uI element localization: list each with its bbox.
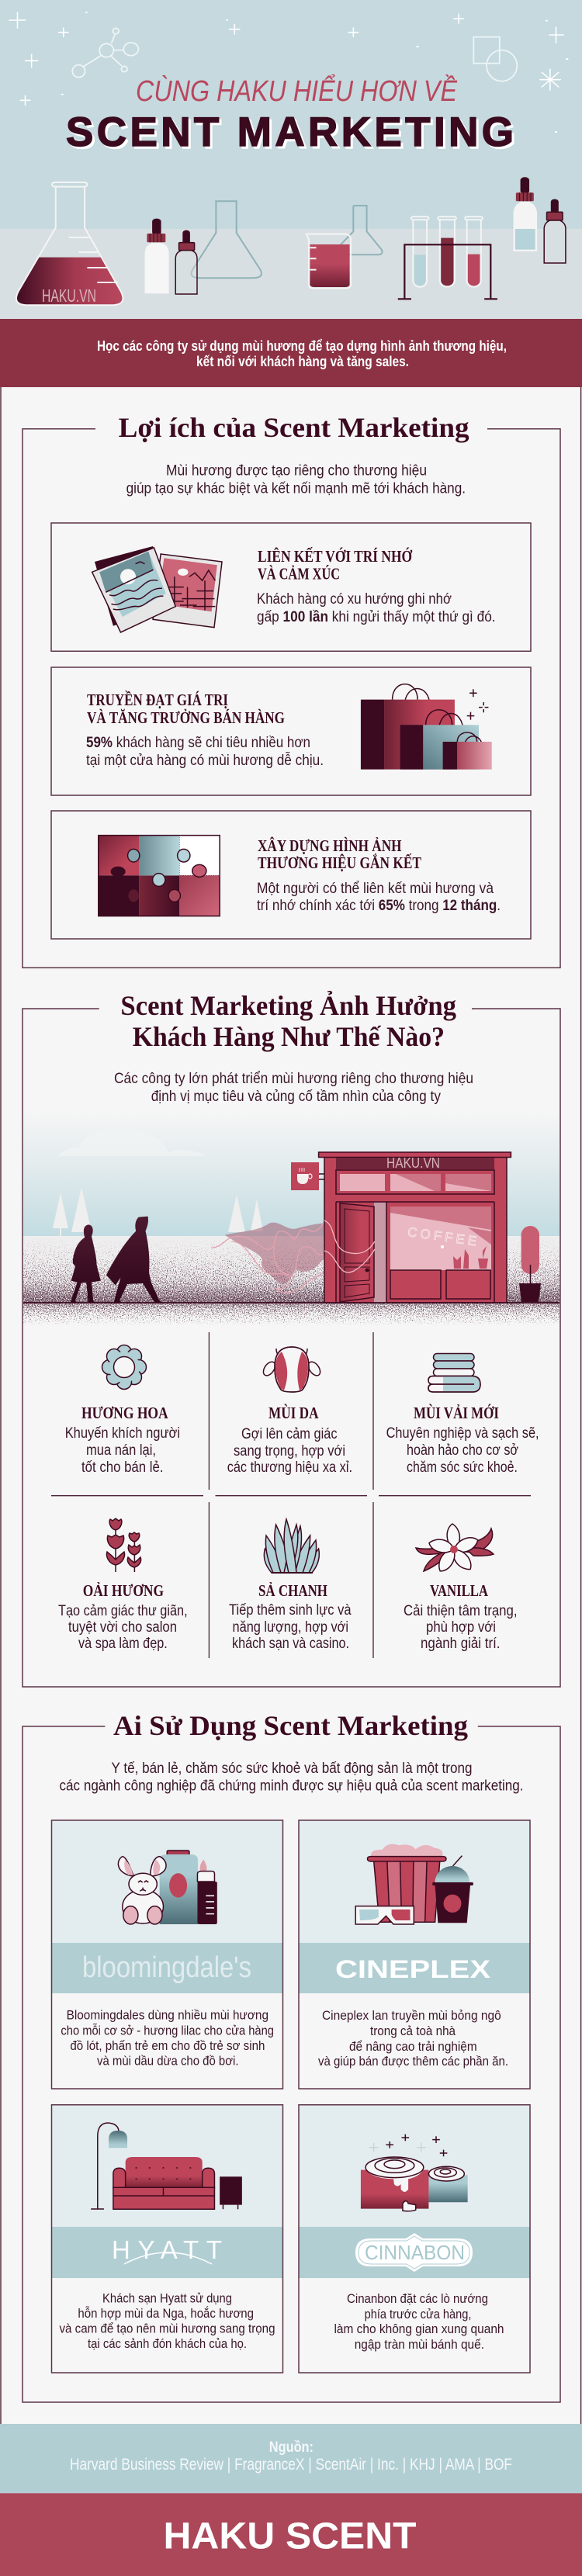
clouds (57, 1128, 206, 1156)
heading: influence: Scent Marketing Ảnh Hưởng (120, 990, 456, 1021)
scent item: floral (65, 1345, 180, 1476)
scent item: lavender (58, 1518, 188, 1652)
heading: lemongrass: SẢ CHANH (258, 1581, 327, 1600)
logo: cinnabon: CINNABON (365, 2241, 465, 2264)
card: cineplex: và giúp bán được thêm các phần ăn. (318, 2054, 508, 2069)
card: bloomingdales (51, 1820, 282, 2089)
heading: new fabric: MÙI VẢI MỚI (414, 1404, 499, 1422)
lower wall panels (390, 1270, 441, 1299)
teal outlined flasks (192, 201, 383, 278)
heading: leather: MÙI DA (268, 1404, 319, 1422)
heading: floral: HƯƠNG HOA (81, 1404, 168, 1422)
benefits intro: Mùi hương được tạo riêng cho thương hiệu (166, 463, 427, 480)
scent item: lemongrass: năng lượng, hợp với (233, 1619, 348, 1636)
sky (23, 1110, 559, 1236)
icon: sofa and lamp (91, 2123, 242, 2209)
icon: lavender (106, 1518, 141, 1572)
text: lavender: Tạo cảm giác thư giãn, (58, 1603, 188, 1619)
grid dividers (51, 1332, 531, 1658)
scent item: new fabric: hoàn hảo cho cơ sở (407, 1442, 518, 1459)
influence intro: Các công ty lớn phát triển mùi hương riêng cho thương hiệu (114, 1071, 473, 1087)
coffee window text: COFFEE (407, 1224, 480, 1249)
scent item: lavender: tuyệt vời cho salon (68, 1619, 177, 1636)
people walking (71, 1217, 162, 1303)
scent item: new fabric (386, 1353, 539, 1476)
card: cinnabon: ngập tràn mùi bánh quế. (355, 2337, 484, 2352)
door frame (336, 1202, 494, 1303)
scent item: floral: tốt cho bán lẻ. (81, 1459, 163, 1476)
text: hyatt: Khách sạn Hyatt sử dụng (102, 2290, 232, 2305)
heading: memory: LIÊN KẾT VỚI TRÍ NHỚ (258, 547, 413, 566)
title line one: CÙNG HAKU HIỂU HƠN VỀ (136, 73, 458, 108)
card: hyatt: hỗn hợp mùi da Nga, hoắc hương (78, 2306, 254, 2321)
icon: cow (261, 1347, 323, 1392)
scent item: lemongrass: khách sạn và casino. (232, 1636, 349, 1652)
card: bloomingdales: cho mỗi cơ sở - hương lilac cho cửa hàng (61, 2023, 274, 2038)
icon: puzzle (99, 836, 220, 916)
ground (23, 1236, 559, 1303)
title line two shadow: SCENT MARKETING (68, 112, 516, 158)
heading: benefits: Lợi ích của Scent Marketing (119, 412, 469, 443)
transom windows (336, 1170, 494, 1194)
icon: popcorn drink and 3D glasses (355, 1844, 473, 1924)
card: hyatt (51, 2105, 282, 2373)
card: hyatt: tại các sảnh đón khách của họ. (88, 2336, 247, 2351)
card: brand image: THƯƠNG HIỆU GẮN KẾT (258, 853, 421, 872)
title line two: SCENT MARKETING (66, 109, 514, 155)
scent item: vanilla (404, 1524, 517, 1652)
shop window (390, 1207, 491, 1270)
potted plant (519, 1226, 541, 1302)
interior floor beside door (374, 1202, 386, 1303)
text: floral: Khuyến khích người (65, 1425, 180, 1442)
dropper bottles right (513, 177, 566, 263)
icon: bunny and baby products (118, 1851, 217, 1924)
panel: who uses scent marketing (23, 1710, 560, 2402)
icon: photos (92, 546, 222, 632)
text: brand image: Một người có thể liên kết mùi hương và (257, 881, 494, 897)
scent cloud (211, 1222, 324, 1293)
scent item: leather: các thương hiệu xa xỉ. (227, 1459, 352, 1476)
header sky (0, 0, 582, 229)
who uses intro: Y tế, bán lẻ, chăm sóc sức khoẻ và bất động sản là một trong (112, 1761, 472, 1777)
scent item: leather (227, 1347, 352, 1476)
beaker with red liquid (307, 234, 351, 289)
heading: vanilla: VANILLA (430, 1581, 489, 1600)
lab bench floor (0, 229, 582, 319)
scent item: vanilla: phù hợp với (426, 1619, 496, 1636)
sources heading: Nguồn: (269, 2439, 314, 2456)
text: leather: Gợi lên cảm giác (241, 1426, 337, 1442)
big flask with red liquid (16, 182, 123, 305)
scent item: lemongrass (229, 1519, 352, 1652)
scent lines over door (324, 1220, 375, 1272)
card: cineplex (299, 1820, 530, 2089)
panel: benefits (23, 412, 560, 968)
text: value: 59% khách hàng sẽ chi tiêu nhiều hơn (86, 735, 310, 751)
open door (340, 1203, 374, 1302)
card: cineplex: để nâng cao trải nghiệm (349, 2039, 477, 2054)
heading: lavender: OẢI HƯƠNG (83, 1581, 164, 1600)
background trees (53, 1187, 263, 1236)
coffee shop: HAKU.VN (386, 1155, 440, 1171)
footer band (0, 2493, 582, 2576)
text: new fabric: Chuyên nghiệp và sạch sẽ, (386, 1425, 539, 1442)
panel: how scent marketing affects customers (23, 990, 560, 1687)
card: hyatt: và cam để tạo nên mùi hương sang trọng (59, 2322, 275, 2336)
test tubes on rack (398, 216, 497, 299)
coffee shop (291, 1152, 511, 1303)
card: cinnabon: làm cho không gian xung quanh (334, 2322, 504, 2336)
icon: flower (102, 1345, 146, 1389)
scent item: vanilla: ngành giải trí. (421, 1636, 500, 1652)
logo: hyatt: HYATT (112, 2235, 222, 2264)
card: brand image: trí nhớ chính xác tới 65% trong 12 tháng. (257, 898, 501, 914)
card: memory: VÀ CẢM XÚC (258, 565, 340, 583)
card: bloomingdales: và mùi dầu dừa cho đồ bơi. (97, 2053, 239, 2068)
text: lemongrass: Tiếp thêm sinh lực và (229, 1602, 352, 1619)
panel: how scent marketing affects customers: Khách Hàng Như Thế Nào? (133, 1021, 445, 1052)
intro band: kết nối với khách hàng và tăng sales. (196, 354, 409, 369)
shop sign hanging (291, 1162, 324, 1190)
window plants (453, 1246, 488, 1269)
dropper bottles left (145, 219, 197, 294)
shop name board (336, 1158, 494, 1169)
card: cinnabon (299, 2105, 530, 2373)
icon: lemongrass (264, 1519, 319, 1573)
panel: how scent marketing affects customers: định vị mục tiêu và củng cố tầm nhìn của công ty (151, 1089, 441, 1105)
street scene illustration (23, 1110, 559, 1326)
logo: cineplex: CINEPLEX (335, 1955, 491, 1983)
card: brand image (51, 811, 531, 939)
scent item: leather: sang trọng, hợp với (234, 1443, 345, 1459)
heading: who uses: Ai Sử Dụng Scent Marketing (113, 1710, 468, 1741)
panel: benefits: giúp tạo sự khác biệt và kết nối mạnh mẽ tới khách hàng. (126, 481, 466, 497)
heading: value: TRUYỀN ĐẠT GIÁ TRỊ (87, 691, 228, 709)
card: memory (51, 523, 531, 651)
intro text: Học các công ty sử dụng mùi hương để tạo dựng hình ảnh thương hiệu, (97, 338, 507, 354)
decorative stars and molecule (9, 12, 569, 133)
scent item: lavender: và spa làm đẹp. (78, 1636, 168, 1652)
card: bloomingdales: đồ lót, phấn trẻ em cho đồ trẻ sơ sinh (70, 2038, 265, 2053)
intro band (0, 319, 582, 387)
text: vanilla: Cải thiện tâm trạng, (404, 1603, 517, 1619)
logo: cinnabon (355, 2233, 473, 2272)
card: value: tại một cửa hàng có mùi hương dễ chịu. (86, 752, 324, 769)
panel: who uses scent marketing: các ngành công nghiệp đã chứng minh được sự hiệu quả của scent marketing. (59, 1778, 523, 1795)
card: value (51, 667, 531, 795)
text: cineplex: Cineplex lan truyền mùi bỏng ngô (322, 2008, 501, 2023)
roof (319, 1152, 511, 1158)
footer brand: HAKU SCENT (163, 2515, 416, 2557)
scent item: new fabric: chăm sóc sức khoẻ. (407, 1459, 518, 1476)
flask watermark: HAKU.VN (42, 286, 96, 306)
icon: folded towels (428, 1353, 480, 1392)
card: value: VÀ TĂNG TRƯỞNG BÁN HÀNG (87, 708, 285, 727)
card: cinnabon: phía trước cửa hàng, (365, 2307, 471, 2322)
logo: bloomingdales: bloomingdale's (82, 1951, 251, 1984)
heading: brand image: XÂY DỰNG HÌNH ẢNH (258, 836, 402, 855)
sources band (0, 2424, 582, 2493)
icon: shopping bags (361, 684, 492, 770)
text: bloomingdales: Bloomingdales dùng nhiều mùi hương (67, 2008, 268, 2023)
scent item: floral: mua nán lại, (86, 1442, 156, 1459)
street line (23, 1302, 559, 1304)
icon: cinnamon rolls (361, 2135, 468, 2211)
card: memory: gấp 100 lần khi ngửi thấy một thứ gì đó. (257, 609, 496, 625)
header illustration panel (0, 0, 582, 319)
icon: vanilla flower (416, 1524, 494, 1574)
card: cineplex: trong cả toà nhà (370, 2024, 456, 2038)
shop facade (324, 1157, 507, 1303)
text: cinnabon: Cinanbon đặt các lò nướng (347, 2291, 488, 2306)
outer side rules (1, 387, 581, 2424)
text: memory: Khách hàng có xu hướng ghi nhớ (257, 591, 452, 608)
